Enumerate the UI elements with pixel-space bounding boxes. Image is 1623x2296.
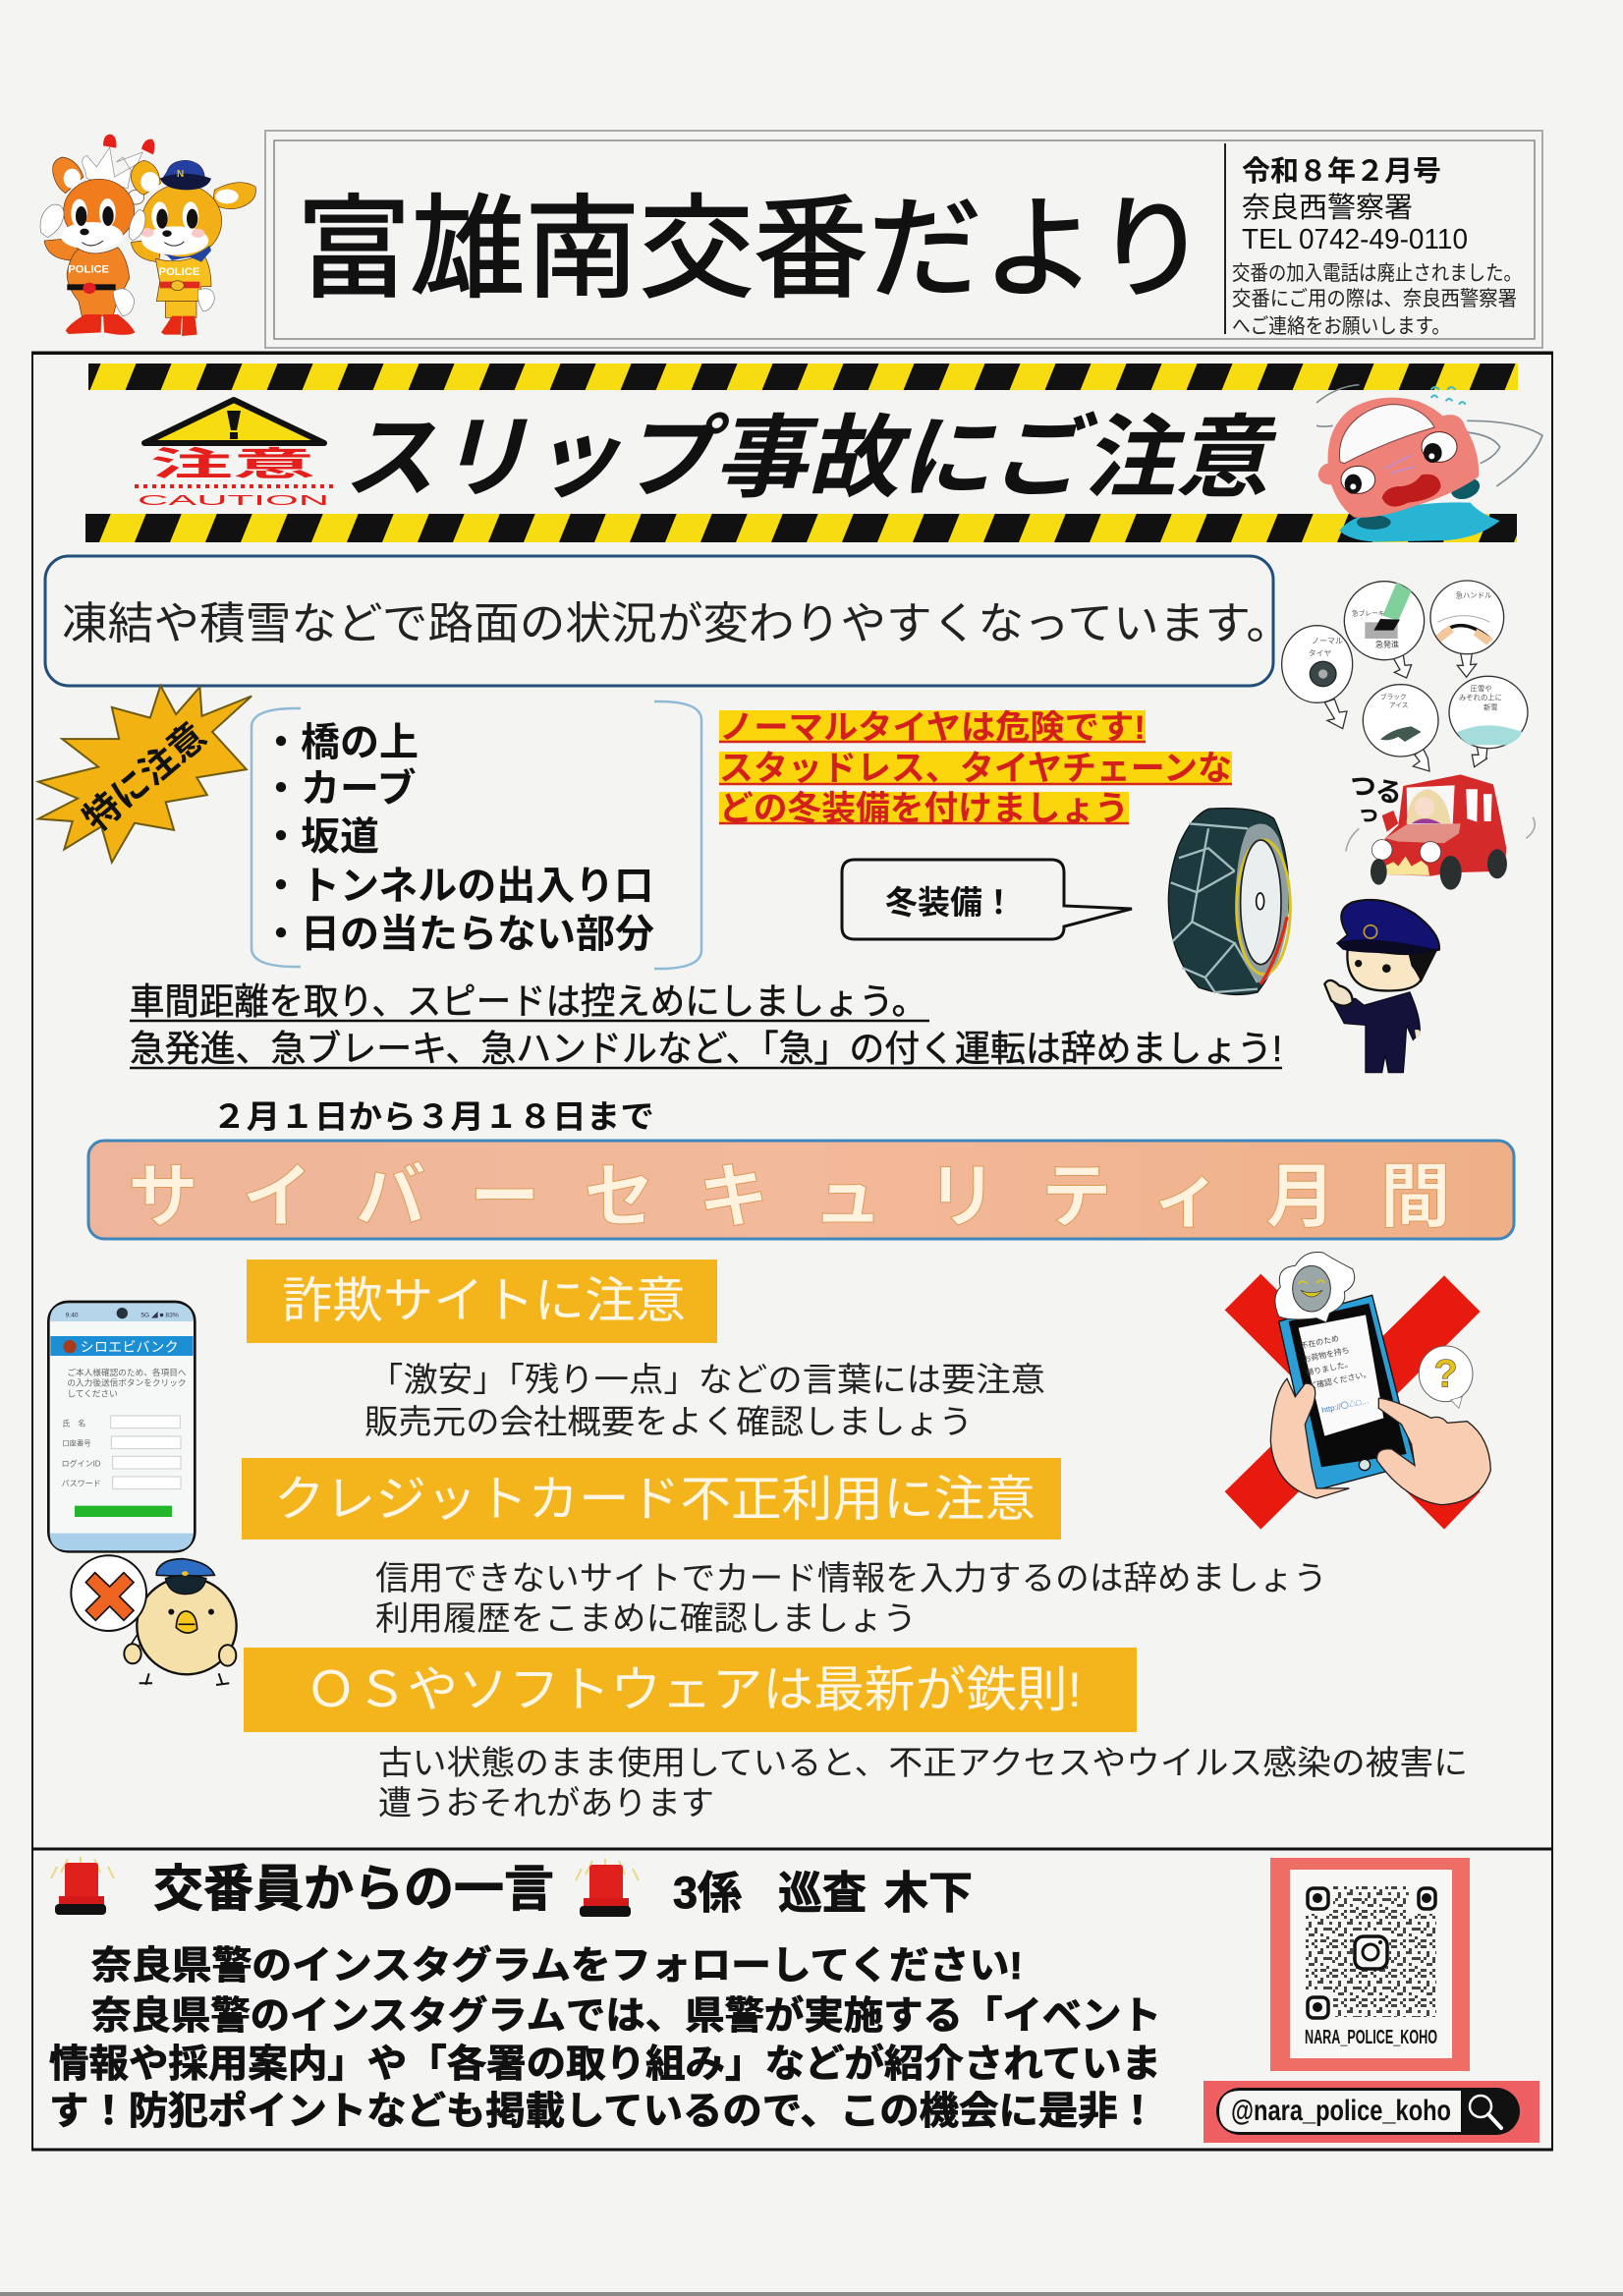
icon: skidding pink car on puddle [1316,385,1542,542]
deer mascot [40,135,154,335]
icon: fake bank phone screen: ご本人様確認のため、各項目へ [67,1367,187,1377]
scam message: ご確認ください。 [1308,1369,1371,1391]
caution english: CAUTION [138,492,329,509]
speech bubble: winter equipment [842,860,1132,939]
issue date: 令和８年２月号 [1242,155,1441,188]
highlighted warning: winter tyres: どの冬装備を付けましょう [719,790,1129,828]
bubble: sudden brake: 急ブレーキ [1352,609,1384,618]
section heading: phishing sites [247,1260,717,1343]
paragraph: software advice: 遭うおそれがあります [378,1785,714,1822]
starburst: especially careful [38,686,252,863]
icon: fake bank phone screen: 氏 名 [62,1419,85,1428]
icon: red car sliding [1346,768,1535,890]
paragraph: Instagram message: 奈良県警のインスタグラムをフォローしてください! [91,1945,1023,1988]
list items: ・橋の上 [261,721,419,764]
bubble: sudden brake: 急発進 [1375,639,1399,648]
paragraph: credit card advice: 信用できないサイトでカード情報を入力するのは辞めましょう [375,1560,1327,1597]
bubble: dry ice road: ブラック [1380,693,1407,701]
author name: 木下 [884,1868,973,1918]
paragraph: credit card advice: 利用履歴をこまめに確認しましょう [375,1600,917,1638]
list items [261,721,654,956]
section heading: credit card fraud: クレジットカード不正利用に注意 [274,1472,1035,1527]
highlighted warning: winter tyres [719,709,1232,828]
speech bubble: winter equipment: 冬装備！ [885,884,1015,921]
icon: chick officer with cross sign [71,1555,237,1685]
scam message: お荷物を持ち [1303,1345,1351,1365]
title: 富雄南交番だより [297,188,1208,312]
paragraph: keep distance [130,981,1282,1069]
bubble: fresh snow: みぞれの上に [1459,694,1502,702]
onomatopoeia tsuru: つる [1346,768,1405,810]
icon: fake bank phone screen [48,1302,195,1551]
icon: fake bank phone screen: の入力後送信ボタンをクリック [67,1377,187,1388]
hazard stripe top [88,364,1518,390]
starburst: especially careful: 特に注意 [76,715,213,840]
section heading: update software: ＯＳやソフトウェアは最新が鉄則! [306,1662,1082,1717]
icon: five bubbles with winter hazards [1282,581,1528,771]
paragraph: keep distance: 車間距離を取り、スピードは控えめにしましょう。 [130,981,926,1022]
search bar: Instagram handle [1203,2081,1539,2143]
deer mascot: POLICE [68,263,109,275]
bubble: fresh snow [1449,676,1528,767]
paragraph: Instagram message: す！防犯ポイントなども掲載しているので、この機会に是非！ [49,2091,1157,2133]
icon: red car sliding: っ [1355,799,1382,828]
bear mascot: POLICE [159,266,200,278]
QR account caption: NARA_POLICE_KOHO [1305,2027,1437,2048]
bubble: fresh snow: 新雪 [1483,703,1498,712]
bottom heading: message from officer: 交番員からの一言 [153,1861,554,1917]
icon: fake bank phone screen: 9:40 [66,1313,79,1319]
scam message: 帰りました。 [1305,1358,1353,1377]
scam message [1300,1328,1376,1417]
date range: ２月１日から３月１８日まで [212,1098,654,1135]
paragraph: credit card advice [375,1560,1327,1638]
author name: 巡査 [778,1868,867,1918]
highlighted warning: winter tyres: スタッドレス、タイヤチェーンな [719,750,1232,788]
question mark: ? [1433,1353,1458,1396]
author name [673,1868,973,1918]
section heading: update software [244,1648,1137,1732]
police station name: 奈良西警察署 [1242,192,1413,224]
bubble: dry ice road [1363,685,1438,771]
paragraph: Instagram message: 奈良県警のインスタグラムでは、県警が実施する「イベント [91,1995,1161,2038]
fake bank name: シロエビバンク [81,1339,179,1355]
icon: fake bank phone screen: してください [67,1388,118,1398]
icon: fake bank phone screen: 5G ◢ ■ 83% [140,1312,179,1319]
paragraph: software advice [378,1745,1468,1822]
paragraph: phishing advice: 「激安」「残り一点」などの言葉には要注意 [368,1362,1045,1399]
bear mascot: N [177,169,184,180]
warning triangle [144,400,324,443]
hazard stripe bottom [85,514,1517,542]
icon: smartphone scam with red cross [1225,1252,1490,1530]
scam message: http://〇△□… [1321,1396,1370,1415]
bubble: sudden steering: 急ハンドル [1456,590,1491,599]
bubble: dry ice road: アイス [1389,701,1408,709]
icon: red siren lamp left [51,1857,114,1915]
list items: ・日の当たらない部分 [261,913,654,956]
red caution label: 注意 [150,446,315,483]
phone notice: へご連絡をお願いします。 [1232,315,1450,338]
phone notice [1232,262,1522,338]
bubble: fresh snow: 圧雪や [1471,684,1492,693]
bracket list: dangerous places [252,701,701,969]
bubble: normal tyre: ノーマル [1312,637,1343,645]
header frame: newsletter masthead [265,131,1542,348]
bear mascot [129,160,255,336]
mascots: deer and bear police characters [40,135,255,336]
paragraph: keep distance: 急発進、急ブレーキ、急ハンドルなど、「急」の付く運転は辞めましょう! [130,1029,1282,1069]
banner: cyber security month: サイバーセキュリティ月間 [128,1158,1494,1237]
phone notice: 交番にご用の際は、奈良西警察署 [1232,288,1517,310]
author name: 3係 [673,1868,742,1918]
paragraph: Instagram message [49,1945,1161,2133]
bubble: normal tyre [1282,626,1353,729]
icon: fake bank phone screen: パスワード [62,1480,101,1488]
text box: road conditions: 凍結や積雪などで路面の状況が変わりやすくなっています。 [62,598,1292,648]
search bar: Instagram handle: @nara_police_koho [1231,2095,1451,2127]
caution sign [135,400,336,509]
bubble: sudden steering [1430,581,1504,677]
slip accident heading: スリップ事故にご注意 [338,407,1289,509]
section heading: credit card fraud [242,1458,1061,1540]
bubble: sudden brake [1344,582,1425,678]
list items: ・坂道 [261,815,379,859]
icon: police officer pointing [1324,900,1439,1073]
paragraph: phishing advice [364,1362,1045,1441]
main outer frame [31,353,1553,2150]
icon: tyre with snow chain [1168,809,1290,994]
phone notice: 交番の加入電話は廃止されました。 [1232,262,1522,285]
list items: ・トンネルの出入り口 [261,865,653,908]
icon: fake bank phone screen: 口座番号 [62,1439,91,1448]
scam message: 不在のため [1300,1333,1340,1351]
text box: road conditions [45,556,1292,686]
telephone: TEL 0742-49-0110 [1242,224,1468,255]
icon: red siren lamp right [576,1859,639,1917]
section heading: phishing sites: 詐欺サイトに注意 [282,1273,686,1328]
list items: ・カーブ [261,767,417,811]
QR code panel [1270,1858,1470,2071]
icon: magnifier [1470,2096,1501,2128]
bubble: normal tyre: タイヤ [1309,648,1331,657]
paragraph: Instagram message: 情報や採用案内」や「各署の取り組み」などが紹介されていま [49,2044,1161,2086]
highlighted warning: winter tyres: ノーマルタイヤは危険です! [719,709,1146,747]
paragraph: software advice: 古い状態のまま使用していると、不正アクセスやウイルス感染の被害に [378,1745,1468,1782]
paragraph: phishing advice: 販売元の会社概要をよく確認しましょう [364,1404,973,1441]
icon: fake bank phone screen: ログインID [62,1458,101,1468]
